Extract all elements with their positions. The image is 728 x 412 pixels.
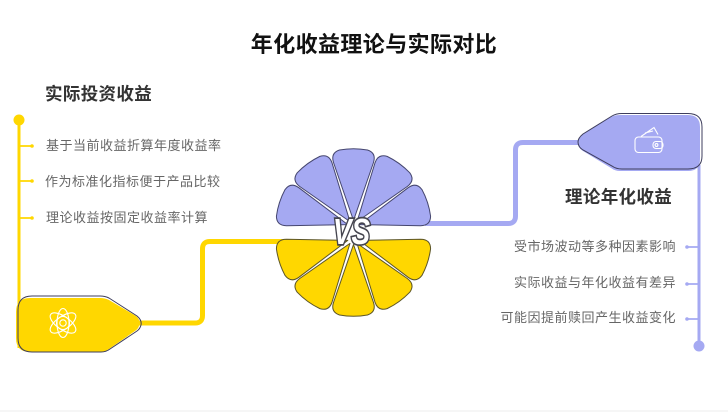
heading: actual investment return: 实际投资收益 bbox=[45, 84, 152, 104]
left text list: 理论收益按固定收益率计算 bbox=[46, 210, 208, 225]
icon: wallet bbox=[635, 128, 663, 152]
VS badge: VS bbox=[333, 211, 370, 252]
icon: atom bbox=[47, 308, 79, 338]
badge: yellow bbox=[16, 296, 141, 352]
connector: yellow bbox=[138, 242, 285, 323]
title: 年化收益理论与实际对比 bbox=[251, 32, 497, 57]
heading: theoretical annualized return: 理论年化收益 bbox=[565, 187, 672, 207]
right text list: 实际收益与年化收益有差异 bbox=[514, 275, 676, 290]
right text list bbox=[500, 239, 676, 325]
left text list: 基于当前收益折算年度收益率 bbox=[46, 138, 222, 153]
fan: upper purple petals bbox=[273, 149, 434, 244]
left text list bbox=[45, 138, 222, 225]
connector: purple bbox=[425, 142, 582, 224]
right text list: 可能因提前赎回产生收益变化 bbox=[500, 310, 676, 325]
right text list: 受市场波动等多种因素影响 bbox=[514, 239, 676, 254]
badge: purple bbox=[578, 114, 702, 171]
left timeline: actual return bbox=[14, 114, 34, 348]
left text list: 作为标准化指标便于产品比较 bbox=[45, 174, 221, 189]
right timeline: theoretical return bbox=[685, 165, 704, 352]
fan: lower yellow petals bbox=[273, 221, 434, 316]
